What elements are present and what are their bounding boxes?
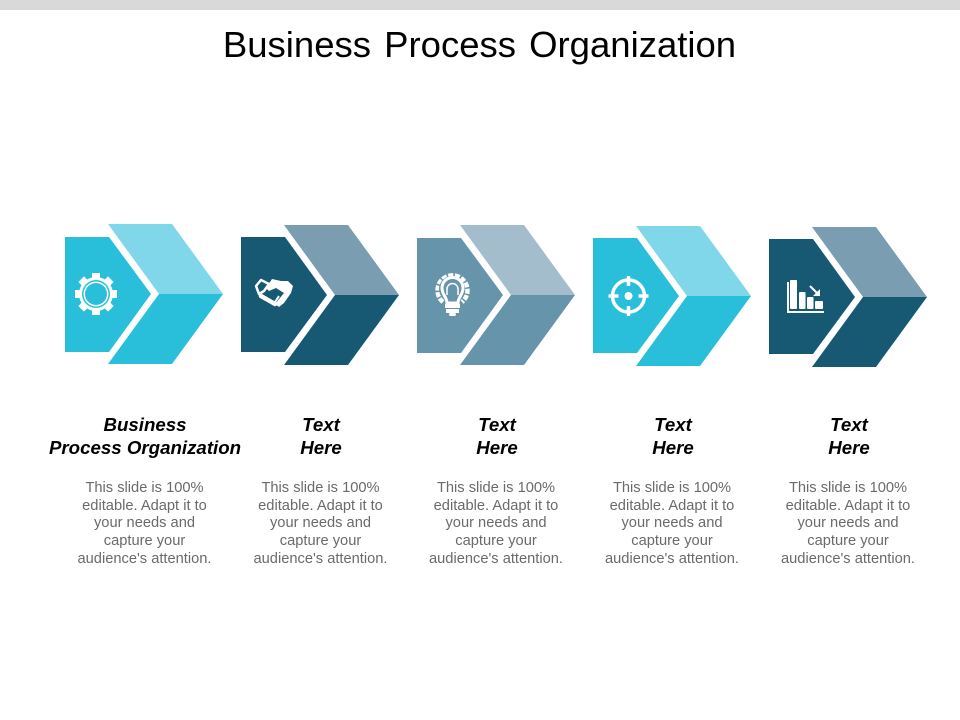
body 2: capture your — [280, 533, 361, 549]
step 5: bar chart chevron — [769, 227, 927, 367]
title: Business Process Organization — [223, 24, 736, 65]
text block 3 — [429, 414, 563, 567]
step 2: handshake chevron — [241, 225, 399, 365]
body 3: editable. Adapt it to — [434, 498, 558, 514]
heading 3: Text — [478, 414, 517, 435]
text block 2 — [254, 414, 388, 567]
heading 4: Here — [652, 437, 694, 458]
text block 4 — [605, 414, 739, 567]
body 3: your needs and — [445, 515, 547, 531]
icon: target — [608, 276, 648, 316]
body 4: editable. Adapt it to — [610, 498, 734, 514]
body 1: audience's attention. — [78, 551, 212, 567]
heading 3: Here — [476, 437, 518, 458]
step 4: target chevron — [593, 226, 751, 366]
body 2: audience's attention. — [254, 551, 388, 567]
body 5: capture your — [807, 533, 889, 549]
heading 4: Text — [654, 414, 693, 435]
icon: light bulb with gear — [438, 275, 468, 316]
heading 2: Text — [302, 414, 341, 435]
body 1: your needs and — [94, 515, 195, 531]
body 2: This slide is 100% — [261, 480, 380, 496]
body 2: editable. Adapt it to — [258, 498, 383, 514]
icon: gear — [75, 273, 117, 315]
body 5: your needs and — [797, 515, 899, 531]
heading 2: Here — [300, 437, 342, 458]
body 3: capture your — [455, 533, 537, 549]
body 1: This slide is 100% — [85, 480, 204, 496]
body 3: audience's attention. — [429, 551, 563, 567]
step 1: gear chevron — [65, 224, 223, 364]
body 1: capture your — [104, 533, 185, 549]
body 4: your needs and — [621, 515, 723, 531]
heading 1: Business — [103, 414, 187, 435]
heading 5: Text — [830, 414, 869, 435]
step 3: light bulb chevron — [417, 225, 575, 365]
body 2: your needs and — [270, 515, 371, 531]
body 3: This slide is 100% — [437, 480, 555, 496]
body 5: audience's attention. — [781, 551, 915, 567]
body 4: This slide is 100% — [613, 480, 731, 496]
icon: handshake — [256, 279, 293, 307]
body 5: This slide is 100% — [789, 480, 907, 496]
text block 5 — [781, 414, 915, 567]
body 4: capture your — [631, 533, 713, 549]
heading 5: Here — [828, 437, 870, 458]
body 1: editable. Adapt it to — [82, 498, 207, 514]
body 4: audience's attention. — [605, 551, 739, 567]
icon: falling bar chart — [787, 280, 824, 313]
text block 1 — [49, 414, 241, 567]
body 5: editable. Adapt it to — [786, 498, 910, 514]
heading 1: Process Organization — [49, 437, 241, 458]
